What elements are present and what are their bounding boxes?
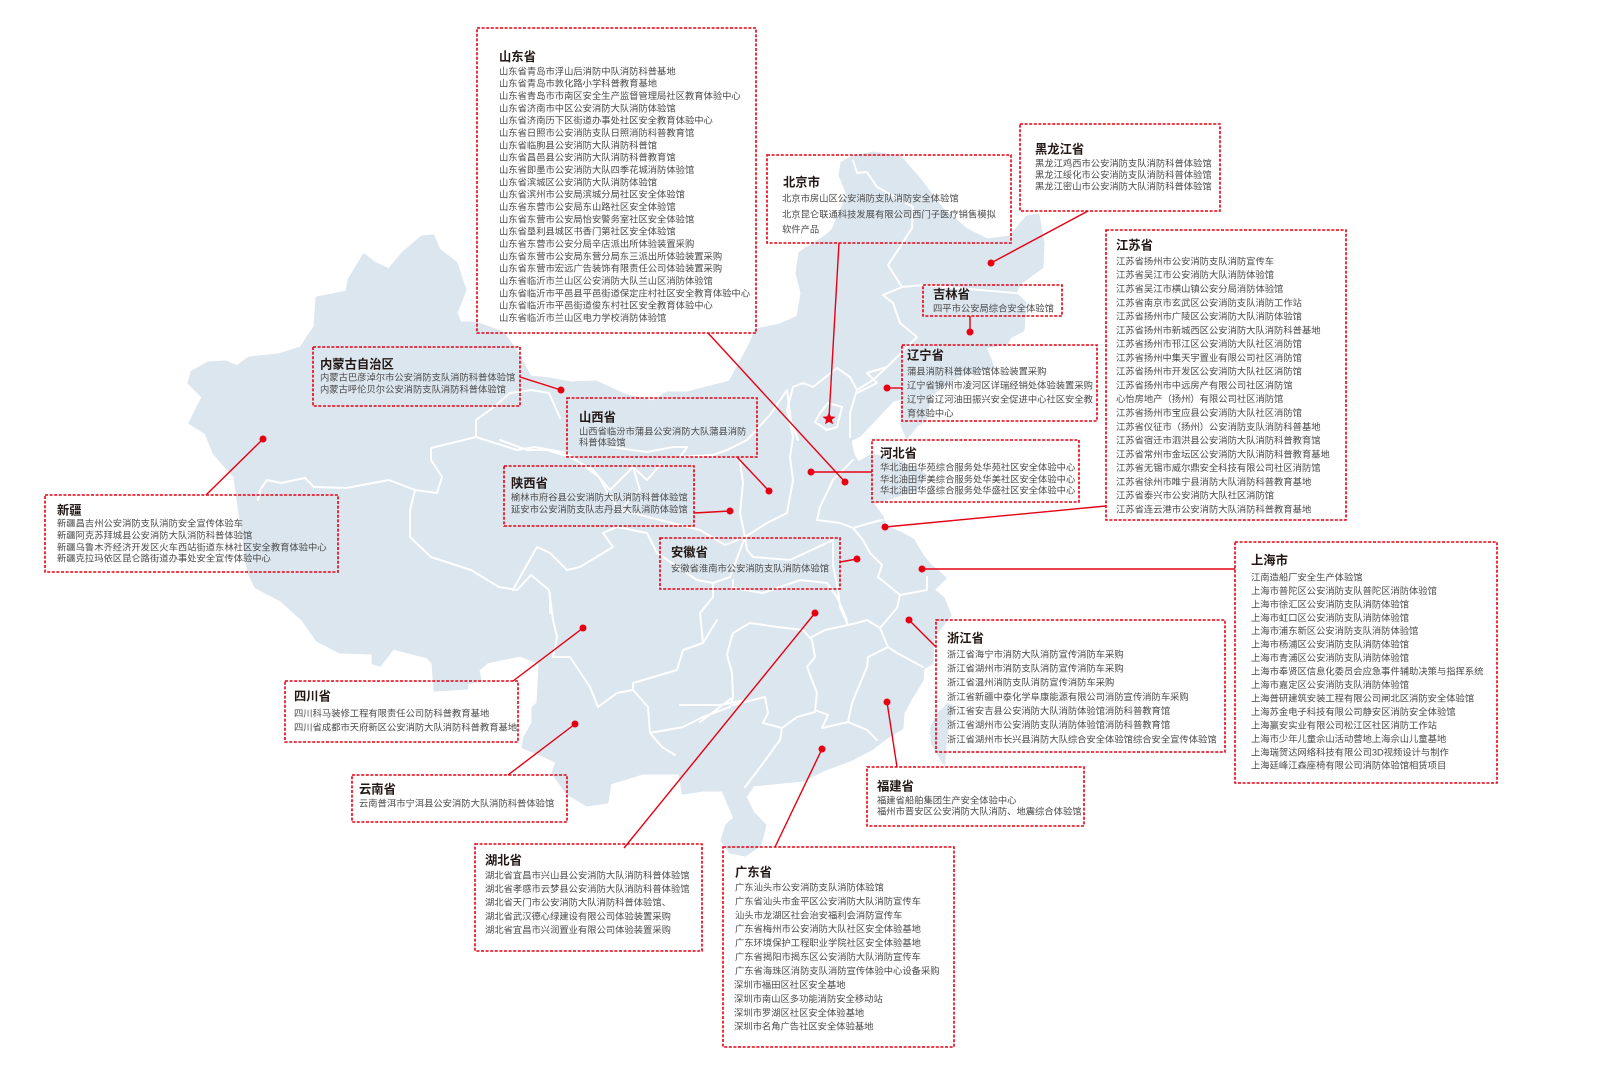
panel: Heilongjiang: 黑龙江鸡西市公安消防支队消防科普体验馆	[1035, 157, 1212, 168]
panel: Zhejiang: 浙江省湖州市公安消防支队消防体验馆消防科普教育馆	[947, 719, 1170, 730]
panel: Shanghai: 上海赢安实业有限公司松江区社区消防工作站	[1251, 719, 1437, 730]
panel: Guangdong: 广东环境保护工程职业学院社区安全体验基地	[735, 937, 921, 948]
panel: Zhejiang: 浙江省温州消防支队消防宣传消防车采购	[947, 677, 1114, 688]
panel: Hebei: 华北油田华美综合服务处华美社区安全体验中心	[880, 473, 1075, 484]
panel: Shandong: 山东省东营市宏远广告装饰有限责任公司体验装置采购	[499, 263, 722, 274]
panel: Jiangsu: 江苏省无锡市威尔鼎安全科技有限公司社区消防馆	[1116, 462, 1321, 473]
panel: Xinjiang: 新疆乌鲁木齐经济开发区火车西站街道东林社区安全教育体验中心	[57, 541, 327, 552]
panel: Guangdong: 深圳市罗湖区社区安全体验基地	[734, 1007, 864, 1018]
panel: Beijing: 软件产品	[782, 223, 819, 234]
panel: Jiangsu	[1106, 230, 1346, 520]
leader: Shaanxi	[694, 508, 734, 514]
panel: Sichuan: 四川省	[294, 688, 331, 704]
panel: Shandong: 山东省东营市公安分局辛店派出所体验装置采购	[499, 238, 694, 249]
panel: Jiangsu: 江苏省仪征市（扬州）公安消防支队消防科普基地	[1116, 421, 1321, 432]
panel: Beijing: 北京市	[783, 174, 820, 190]
panel: Anhui	[660, 538, 840, 589]
leader: Shanxi	[737, 457, 772, 494]
leader: Jiangsu	[882, 506, 1106, 530]
panel: Sichuan: 四川科马装修工程有限责任公司防科普教育基地	[294, 707, 489, 718]
panel: Hebei	[872, 440, 1079, 502]
panel: Guangdong: 广东省梅州市公安消防大队社区安全体验基地	[735, 923, 921, 934]
panel: Sichuan: 四川省成都市天府新区公安消防大队消防科普教育基地	[294, 721, 517, 732]
panel: Fujian: 福建省船舶集团生产安全体验中心	[877, 794, 1016, 805]
panel: Shandong: 山东省临沂市平邑街道俊东村社区安全教育体验中心	[499, 300, 713, 311]
panel: Zhejiang: 浙江省湖州市消防支队消防宣传消防车采购	[947, 662, 1124, 674]
panel: Shandong: 山东省滨城区公安消防大队消防体验馆	[499, 176, 657, 187]
panel: Inner Mongolia: 内蒙古呼伦贝尔公安消防支队消防科普体验馆	[320, 383, 506, 394]
panel: Shanghai: 上海市浦东新区公安消防支队消防体验馆	[1251, 625, 1418, 636]
panel: Shanghai: 上海市	[1251, 552, 1288, 568]
panel: Jiangsu: 江苏省宿迁市泗洪县公安消防大队消防科普教育馆	[1116, 434, 1321, 446]
panel: Liaoning	[902, 345, 1097, 421]
map of China	[189, 153, 1062, 855]
panel: Inner Mongolia	[313, 347, 520, 406]
panel: Shaanxi: 榆林市府谷县公安消防大队消防科普体验馆	[511, 491, 688, 502]
panel: Xinjiang: 新疆克拉玛依区昆仑路街道办事处安全宣传体验中心	[57, 552, 271, 563]
panel: Shanghai: 上海廷峰江森座椅有限公司消防体验馆相赁项目	[1251, 759, 1446, 770]
panel: Shandong: 山东省济南历下区街道办事处社区安全教育体验中心	[499, 115, 713, 126]
panel: Jiangsu: 江苏省徐州市睢宁县消防大队消防科普教育基地	[1116, 476, 1311, 487]
panel: Liaoning: 辽宁省锦州市凌河区详瑞经销处体验装置采购	[907, 379, 1093, 390]
panel: Shanghai	[1235, 542, 1497, 783]
panel: Zhejiang: 浙江省海宁市消防大队消防宣传消防车采购	[947, 648, 1124, 659]
panel: Inner Mongolia: 内蒙古自治区	[320, 356, 394, 372]
panel: Jiangsu: 江苏省吴江市横山镇公安分局消防体验馆	[1116, 283, 1283, 294]
icon: Beijing star	[822, 412, 836, 424]
panel: Shanghai: 上海市徐汇区公安消防支队消防体验馆	[1251, 598, 1409, 609]
panel: Jiangsu: 江苏省	[1116, 238, 1153, 252]
panel: Shandong: 山东省临沂市兰山区公安消防大队兰山区消防体验馆	[499, 275, 713, 286]
leader: Shanghai	[918, 566, 1235, 572]
panel: Jiangsu: 江苏省常州市金坛区公安消防大队消防科普教育基地	[1116, 448, 1330, 459]
panel: Guangdong: 广东汕头市公安消防支队消防体验馆	[735, 881, 884, 892]
panel: Hubei	[475, 844, 702, 951]
panel: Shandong: 山东省东营市公安局东山路社区安全体验馆	[499, 201, 676, 212]
panel: Shanghai: 上海市青浦区公安消防支队消防体验馆	[1251, 652, 1409, 663]
panel: Xinjiang: 新疆昌吉州公安消防支队消防安全宣传体验车	[57, 517, 243, 528]
panel: Shanghai: 上海市杨浦区公安消防支队消防体验馆	[1251, 639, 1409, 650]
panel: Shandong: 山东省青岛市浮山后消防中队消防科普基地	[499, 65, 676, 76]
panel: Hebei: 华北油田华苑综合服务处华苑社区安全体验中心	[880, 461, 1075, 472]
panel: Hubei: 湖北省	[485, 852, 522, 868]
panel: Shanxi: 科普体验馆	[579, 436, 626, 447]
panel: Shanghai: 上海瑞贺达网络科技有限公司3D视频设计与制作	[1251, 746, 1449, 757]
leader: Heilongjiang	[988, 211, 1088, 266]
panel: Xinjiang: 新疆	[57, 502, 82, 518]
panel: Yunnan: 云南普洱市宁洱县公安消防大队消防科普体验馆	[359, 797, 554, 808]
panel: Fujian	[867, 767, 1084, 826]
panel: Guangdong: 广东省	[735, 864, 772, 880]
panel: Guangdong: 深圳市福田区社区安全基地	[734, 979, 846, 990]
panel: Jiangsu: 江苏省扬州市邗江区公安消防大队社区消防馆	[1116, 338, 1302, 349]
panel: Hubei: 湖北省武汉德心绿建设有限公司体验装置采购	[485, 910, 671, 921]
panel: Jilin: 四平市公安局综合安全体验馆	[933, 302, 1054, 313]
panel: Shandong	[477, 28, 756, 333]
leader: Fujian	[884, 698, 897, 767]
panel: Beijing: 北京市房山区公安消防支队消防安全体验馆	[782, 192, 959, 203]
panel: Shandong: 山东省临沂市平邑县平邑街道保定庄村社区安全教育体验中心	[499, 287, 750, 298]
panel: Shandong: 山东省临沂市兰山区电力学校消防体验馆	[499, 312, 666, 323]
leader: Sichuan	[513, 624, 586, 681]
leader: Zhejiang	[906, 616, 936, 647]
panel: Fujian: 福建省	[877, 778, 914, 794]
panel: Jiangsu: 江苏省扬州中集天宇置业有限公司社区消防馆	[1116, 352, 1302, 363]
panel: Hebei: 华北油田华盛综合服务处华盛社区安全体验中心	[880, 484, 1075, 495]
panel: Shaanxi: 延安市公安消防支队志丹县大队消防体验馆	[511, 503, 688, 514]
panel: Shanghai: 上海普研建筑安装工程有限公司闸北区消防安全体验馆	[1251, 692, 1474, 704]
panel: Jiangsu: 江苏省扬州市新城西区公安消防大队消防科普基地	[1116, 324, 1321, 335]
panel: Liaoning: 蒲县消防科普体验馆体验装置采购	[907, 365, 1046, 376]
panel: Shandong: 山东省东营市公安局东营分局东三派出所体验装置采购	[499, 250, 722, 261]
panel: Shandong: 山东省青岛市市南区安全生产监督管理局社区教育体验中心	[499, 90, 741, 101]
panel: Yunnan	[352, 775, 567, 822]
leader: Anhui	[840, 556, 860, 562]
panel: Shaanxi: 陕西省	[511, 476, 548, 490]
panel: Jiangsu: 江苏省南京市玄武区公安消防支队消防工作站	[1116, 297, 1302, 308]
panel: Shandong: 山东省济南市中区公安消防大队消防体验馆	[499, 102, 676, 113]
panel: Shanghai: 上海市虹口区公安消防支队消防体验馆	[1251, 612, 1409, 623]
panel: Xinjiang	[45, 495, 338, 572]
panel: Guangdong: 广东省海珠区消防支队消防宣传体验中心设备采购	[735, 965, 940, 976]
panel: Zhejiang: 浙江省安吉县公安消防大队消防体验馆消防科普教育馆	[947, 705, 1170, 716]
panel: Zhejiang: 浙江省	[947, 630, 984, 646]
panel: Hubei: 湖北省孝感市云梦县公安消防大队消防科普体验馆	[485, 883, 690, 894]
panel: Jilin: 吉林省	[933, 286, 970, 302]
panel: Liaoning: 辽宁省	[907, 348, 944, 362]
panel: Shandong: 山东省青岛市敦化路小学科普教育基地	[499, 78, 657, 89]
panel: Shanghai: 上海市少年儿童佘山活动营地上海佘山儿童基地	[1251, 733, 1446, 744]
panel: Shandong: 山东省垦利县城区书香门第社区安全体验馆	[499, 226, 676, 237]
panel: Hubei: 湖北省宜昌市兴润置业有限公司体验装置采购	[485, 924, 671, 935]
panel: Shandong: 山东省东营市公安局怡安警务室社区安全体验馆	[499, 213, 694, 224]
panel: Anhui: 安徽省淮南市公安消防支队消防体验馆	[671, 562, 829, 573]
panel: Liaoning: 育体验中心	[907, 407, 954, 418]
panel: Jiangsu: 江苏省连云港市公安消防大队消防科普教育基地	[1116, 503, 1311, 514]
panel: Shandong: 山东省临朐县公安消防大队消防科普馆	[499, 139, 657, 150]
panel: Guangdong: 深圳市名角广告社区安全体验基地	[734, 1021, 873, 1032]
panel: Shanxi	[567, 398, 757, 457]
panel: Heilongjiang: 黑龙江密山市公安消防大队消防科普体验馆	[1035, 180, 1212, 191]
panel: Shanghai: 上海市嘉定区公安消防支队消防体验馆	[1251, 679, 1409, 690]
panel: Anhui: 安徽省	[671, 544, 708, 560]
panel: Shanghai: 上海市普陀区公安消防支队普陀区消防体验馆	[1251, 585, 1437, 596]
panel: Fujian: 福州市晋安区公安消防大队消防、地震综合体验馆	[877, 805, 1082, 816]
panel: Beijing	[767, 155, 1011, 243]
panel: Guangdong: 深圳市南山区多功能消防安全移动站	[734, 993, 883, 1004]
panel: Hubei: 湖北省宜昌市兴山县公安消防大队消防科普体验馆	[485, 869, 690, 880]
panel: Beijing: 北京昆仑联通科技发展有限公司西门子医疗销售模拟	[782, 208, 997, 219]
panel: Yunnan: 云南省	[359, 782, 396, 796]
panel: Jiangsu: 江苏省吴江市公安消防大队消防体验馆	[1116, 269, 1274, 280]
panel: Shandong: 山东省日照市公安消防支队日照消防科普教育馆	[499, 127, 694, 138]
leader: Hebei	[808, 468, 872, 476]
panel: Jiangsu: 江苏省扬州市开发区公安消防大队社区消防馆	[1116, 366, 1302, 377]
panel: Zhejiang: 浙江省湖州市长兴县消防大队综合安全体验馆综合安全宣传体验馆	[947, 733, 1217, 744]
panel: Jilin	[923, 285, 1062, 316]
panel: Jiangsu: 江苏省扬州市中远房产有限公司社区消防馆	[1116, 379, 1293, 390]
leader: Yunnan	[508, 720, 578, 775]
panel: Hebei: 河北省	[880, 446, 917, 460]
panel: Jiangsu: 心怡房地产（扬州）有限公司社区消防馆	[1116, 393, 1283, 404]
panel: Jiangsu: 江苏省泰兴市公安消防大队社区消防馆	[1116, 490, 1274, 501]
panel: Guangdong: 广东省汕头市金平区公安消防大队消防宣传车	[735, 895, 921, 906]
panel: Zhejiang	[936, 620, 1225, 752]
panel: Shandong: 山东省即墨市公安消防大队四季花城消防体验馆	[499, 164, 694, 175]
panel: Shanghai: 上海市奉贤区信息化委员会应急事件辅助决策与指挥系统	[1251, 666, 1483, 677]
panel: Guangdong: 广东省揭阳市揭东区公安消防大队消防宣传车	[735, 951, 921, 962]
leader: Beijing	[829, 243, 839, 418]
leader: Guangdong	[775, 746, 826, 847]
panel: Guangdong	[723, 847, 954, 1047]
panel: Jiangsu: 江苏省扬州市公安消防支队消防宣传车	[1116, 255, 1274, 266]
panel: Shandong: 山东省滨州市公安局滨城分局社区安全体验馆	[499, 189, 685, 200]
panel: Hubei: 湖北省天门市公安消防大队消防科普体验馆、	[485, 897, 671, 908]
panel: Shanghai: 上海苏金电子科技有限公司静安区消防安全体验馆	[1251, 706, 1456, 717]
panel: Heilongjiang	[1020, 124, 1220, 211]
panel: Jiangsu: 江苏省扬州市宝应县公安消防大队社区消防馆	[1116, 407, 1302, 418]
panel: Jiangsu: 江苏省扬州市广陵区公安消防大队消防体验馆	[1116, 310, 1302, 322]
panel: Shanxi: 山西省	[579, 410, 616, 424]
panel: Sichuan	[285, 681, 518, 742]
leader: Jilin	[966, 316, 974, 336]
panel: Shanxi: 山西省临汾市蒲县公安消防大队蒲县消防	[579, 425, 746, 436]
panel: Xinjiang: 新疆阿克苏拜城县公安消防大队消防科普体验馆	[57, 529, 252, 540]
panel: Guangdong: 汕头市龙湖区社会治安福利会消防宣传车	[735, 909, 902, 920]
leader: Shandong	[708, 333, 848, 486]
panel: Inner Mongolia: 内蒙古巴彦淖尔市公安消防支队消防科普体验馆	[320, 371, 515, 382]
panel: Heilongjiang: 黑龙江绥化市公安消防支队消防科普体验馆	[1035, 169, 1212, 180]
panel: Shandong: 山东省	[499, 49, 536, 64]
leader: Liaoning	[884, 384, 902, 392]
leader: Inner Mongolia	[520, 377, 564, 394]
panel: Heilongjiang: 黑龙江省	[1035, 142, 1084, 156]
panel: Shandong: 山东省昌邑县公安消防大队消防科普教育馆	[499, 152, 676, 163]
panel: Shaanxi	[504, 466, 694, 526]
panel: Liaoning: 辽宁省辽河油田振兴安全促进中心社区安全教	[907, 393, 1093, 404]
leader: Hubei	[624, 610, 818, 848]
leader: Xinjiang	[206, 436, 266, 495]
panel: Shanghai: 江南造船厂安全生产体验馆	[1251, 571, 1363, 582]
panel: Zhejiang: 浙江省新疆中泰化学阜康能源有限公司消防宣传消防车采购	[947, 691, 1189, 702]
